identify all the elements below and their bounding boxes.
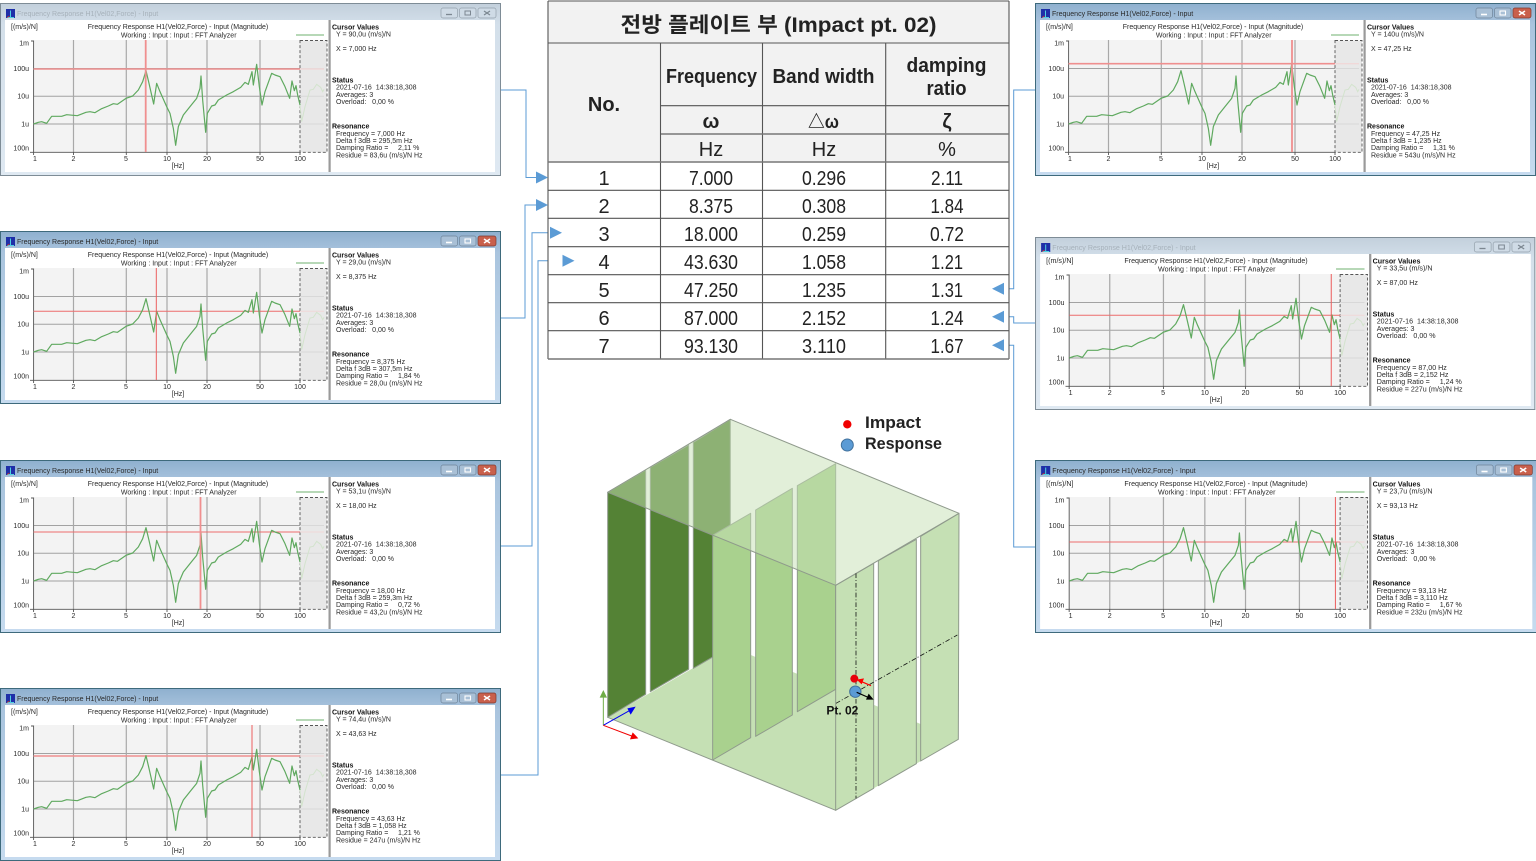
- arrow to row 6: [992, 311, 1004, 323]
- FFT window 3: 18.00 Hz: 1m: [19, 498, 29, 504]
- FFT window 2: 8.375 Hz: 20: [203, 384, 211, 391]
- row 7: 1.67: [930, 336, 964, 358]
- FFT window 4: 43.63 Hz: Residue = 247u (m/s)/N Hz: [336, 838, 421, 844]
- FFT window 5: 47.25 Hz: Frequency Response H1(Vel02,Force) - Input: [1052, 11, 1193, 18]
- FFT window 4: 43.63 Hz: 1u: [21, 806, 29, 814]
- FFT window 3: 18.00 Hz: Working : Input : Input : FFT Analyzer: [121, 490, 237, 496]
- FFT window 2: 8.375 Hz: 10: [163, 384, 171, 391]
- FFT window 3: 18.00 Hz: [(m/s)/N]: [11, 481, 38, 488]
- FFT window 4: 43.63 Hz: 2: [72, 841, 76, 848]
- response point marker: [850, 686, 861, 697]
- FFT window 3: 18.00 Hz: Damping Ratio = 0,72 %: [336, 602, 420, 609]
- FFT window 6: 87.00 Hz: Overload: 0,00 %: [1377, 333, 1436, 340]
- FFT window 6: 87.00 Hz: Status: [1373, 312, 1394, 318]
- FFT window 7: 93.13 Hz: 10: [1201, 613, 1209, 620]
- FFT window 5: 47.25 Hz: 2: [1107, 156, 1111, 163]
- FFT window 3: 18.00 Hz: 1: [33, 613, 37, 620]
- FFT window 6: 87.00 Hz: Resonance: [1373, 358, 1411, 364]
- FFT window 1: 7.000 Hz: 1u: [21, 122, 29, 128]
- FFT window 2: 8.375 Hz: Y = 29,0u (m/s)/N: [336, 260, 391, 266]
- FFT window 6: 87.00 Hz: [1036, 238, 1535, 410]
- FFT window 4: 43.63 Hz: 2021-07-16 14:38:18,308: [336, 770, 417, 776]
- FFT window 2: 8.375 Hz: Frequency Response H1(Vel02,Force) - Input: [17, 239, 158, 246]
- FFT window 5: 47.25 Hz: Resonance: [1367, 124, 1404, 130]
- FFT window 1: 7.000 Hz: Working : Input : Input : FFT Analyzer: [121, 32, 237, 40]
- FFT window 1: 7.000 Hz: Resonance: [332, 124, 369, 130]
- row 1: [598, 168, 963, 190]
- header: damping ratio: [906, 55, 986, 100]
- FFT window 5: 47.25 Hz: Status: [1367, 78, 1388, 84]
- unit row: Hz: [812, 139, 836, 161]
- FFT window 3: 18.00 Hz: Residue = 43,2u (m/s)/N Hz: [336, 610, 423, 616]
- FFT window 6: 87.00 Hz: 1: [1069, 390, 1073, 397]
- FFT window 1: 7.000 Hz: Frequency Response H1(Vel02,Force) - Input: [17, 11, 158, 18]
- FFT window 3: 18.00 Hz: [Hz]: [172, 620, 184, 627]
- connector: chart 5 to row 5: [1003, 90, 1035, 289]
- FFT window 3: 18.00 Hz: Status: [332, 534, 354, 542]
- FFT window 1: 7.000 Hz: 20: [203, 156, 211, 163]
- FFT window 5: 47.25 Hz: 10u: [1052, 94, 1064, 100]
- FFT window 3: 18.00 Hz: 50: [256, 613, 264, 620]
- row 7: 3.110: [802, 336, 846, 358]
- legend: impact dot: [843, 420, 852, 428]
- floor: [608, 647, 958, 810]
- header: Band width: Band width: [772, 66, 874, 88]
- FFT window 7: 93.13 Hz: [Hz]: [1210, 620, 1222, 627]
- FFT window 2: 8.375 Hz: Residue = 28,0u (m/s)/N Hz: [336, 380, 423, 388]
- FFT window 6: 87.00 Hz: 100n: [1049, 380, 1065, 386]
- FFT window 4: 43.63 Hz: Working : Input : Input : FFT Analyzer: [121, 718, 237, 724]
- FFT window 5: 47.25 Hz: 5: [1159, 156, 1163, 163]
- row 4: [598, 252, 963, 274]
- row 7: 7: [598, 336, 610, 358]
- FFT window 4: 43.63 Hz: Overload: 0,00 %: [336, 784, 394, 791]
- FFT window 4: 43.63 Hz: Frequency = 43,63 Hz: [336, 816, 406, 823]
- FFT window 7: 93.13 Hz: 20: [1242, 613, 1250, 620]
- FFT window 6: 87.00 Hz: Delta f 3dB = 2,152 Hz: [1377, 372, 1449, 379]
- FFT window 5: 47.25 Hz: [(m/s)/N]: [1046, 24, 1073, 31]
- FFT window 3: 18.00 Hz: Frequency Response H1(Vel02,Force) - Input: [17, 468, 158, 475]
- FFT window 3: 18.00 Hz: X = 18,00 Hz: [336, 503, 377, 510]
- FFT window 5: 47.25 Hz: 1: [1068, 156, 1072, 163]
- FFT window 4: 43.63 Hz: Status: [332, 762, 354, 770]
- FFT window 7: 93.13 Hz: 100n: [1049, 603, 1065, 609]
- row 3: 0.259: [802, 224, 846, 246]
- FFT window 5: 47.25 Hz: Delta f 3dB = 1,235 Hz: [1371, 138, 1442, 145]
- FFT window 3: 18.00 Hz: 20: [203, 613, 211, 620]
- FFT window 2: 8.375 Hz: 100u: [13, 294, 29, 301]
- unit row: Hz: [699, 139, 723, 161]
- header: damping ratio: ratio: [926, 78, 966, 100]
- legend: impact label: Impact: [865, 414, 922, 432]
- middle partition panels: [713, 464, 836, 760]
- FFT window 4: 43.63 Hz: 10u: [17, 778, 29, 786]
- right wall panels: [836, 513, 959, 810]
- FFT window 1: 7.000 Hz: 1m: [19, 40, 29, 48]
- FFT window 1: 7.000 Hz: 100u: [13, 66, 29, 73]
- FFT window 5: 47.25 Hz: 1m: [1054, 40, 1064, 48]
- FFT window 5: 47.25 Hz: Cursor Values: [1367, 24, 1414, 32]
- row 3: 0.72: [930, 224, 964, 246]
- FFT window 3: 18.00 Hz: Cursor Values: [332, 482, 379, 488]
- FFT window 5: 47.25 Hz: 20: [1238, 156, 1246, 163]
- FFT window 6: 87.00 Hz: 50: [1295, 390, 1303, 397]
- FFT window 3: 18.00 Hz: 5: [124, 613, 128, 620]
- FFT window 7: 93.13 Hz: Status: [1373, 535, 1394, 541]
- FFT window 5: 47.25 Hz: X = 47,25 Hz: [1371, 46, 1412, 53]
- connector: chart 6 to row 6: [1003, 317, 1035, 323]
- FFT window 3: 18.00 Hz: 100: [294, 613, 306, 620]
- FFT window 7: 93.13 Hz: Resonance: [1373, 581, 1411, 587]
- FFT window 1: 7.000 Hz: [0, 4, 500, 176]
- FFT window 2: 8.375 Hz: [(m/s)/N]: [11, 252, 38, 259]
- FFT window 2: 8.375 Hz: 1: [33, 384, 37, 391]
- FFT window 5: 47.25 Hz: 2021-07-16 14:38:18,308: [1371, 84, 1452, 92]
- FFT window 2: 8.375 Hz: Damping Ratio = 1,84 %: [336, 373, 420, 380]
- row 3: 18.000: [684, 224, 738, 246]
- FFT window 3: 18.00 Hz: Delta f 3dB = 259,3m Hz: [336, 595, 413, 602]
- legend: response dot: [841, 439, 853, 451]
- FFT window 4: 43.63 Hz: 10: [163, 841, 171, 848]
- FFT window 2: 8.375 Hz: Resonance: [332, 352, 369, 358]
- FFT window 1: 7.000 Hz: [Hz]: [172, 163, 184, 170]
- row 4: 1.058: [802, 252, 846, 274]
- impact point marker: [850, 675, 858, 683]
- FFT window 6: 87.00 Hz: Averages: 3: [1377, 326, 1415, 333]
- row 5: 47.250: [684, 280, 738, 302]
- FFT window 6: 87.00 Hz: 20: [1242, 390, 1250, 397]
- row 6: 6: [598, 308, 610, 330]
- row 5: 1.31: [931, 280, 963, 302]
- FFT window 3: 18.00 Hz: Y = 53,1u (m/s)/N: [336, 488, 391, 496]
- FFT window 1: 7.000 Hz: Y = 90,0u (m/s)/N: [336, 32, 391, 38]
- FFT window 1: 7.000 Hz: 10: [163, 156, 171, 163]
- FFT window 1: 7.000 Hz: 2021-07-16 14:38:18,308: [336, 84, 417, 92]
- FFT window 7: 93.13 Hz: 1u: [1057, 579, 1065, 585]
- FFT window 4: 43.63 Hz: 100: [294, 841, 306, 848]
- symbol row: [703, 111, 952, 133]
- FFT window 2: 8.375 Hz: 50: [256, 384, 264, 391]
- row 4: 1.21: [931, 252, 963, 274]
- FFT window 7: 93.13 Hz: Cursor Values: [1373, 482, 1421, 488]
- FFT window 4: 43.63 Hz: [Hz]: [172, 848, 184, 855]
- FFT window 5: 47.25 Hz: [Hz]: [1207, 163, 1219, 170]
- FFT window 2: 8.375 Hz: X = 8,375 Hz: [336, 274, 377, 281]
- row 1: 7.000: [689, 168, 733, 190]
- arrow to row 2: [536, 199, 548, 211]
- coordinate axes: [600, 690, 638, 739]
- FFT window 7: 93.13 Hz: [(m/s)/N]: [1046, 481, 1073, 488]
- FFT window 6: 87.00 Hz: 2021-07-16 14:38:18,308: [1377, 319, 1459, 325]
- FFT window 4: 43.63 Hz: Y = 74,4u (m/s)/N: [336, 716, 391, 724]
- FFT window 1: 7.000 Hz: Damping Ratio = 2,11 %: [336, 145, 419, 152]
- FFT window 7: 93.13 Hz: X = 93,13 Hz: [1377, 503, 1418, 510]
- FFT window 3: 18.00 Hz: 10u: [17, 550, 29, 558]
- FFT window 4: 43.63 Hz: 20: [203, 841, 211, 848]
- FFT window 4: 43.63 Hz: 50: [256, 841, 264, 848]
- arrow to row 3: [550, 227, 562, 239]
- FFT window 2: 8.375 Hz: Overload: 0,00 %: [336, 327, 394, 334]
- FFT window 5: 47.25 Hz: Averages: 3: [1371, 92, 1408, 99]
- FFT window 7: 93.13 Hz: 10u: [1053, 551, 1065, 557]
- row 1: 0.296: [802, 168, 846, 190]
- FFT window 3: 18.00 Hz: Averages: 3: [336, 549, 373, 556]
- FFT window 1: 7.000 Hz: Averages: 3: [336, 92, 373, 99]
- FFT window 1: 7.000 Hz: 10u: [17, 94, 29, 100]
- FFT window 6: 87.00 Hz: 100: [1334, 390, 1346, 397]
- FFT window 2: 8.375 Hz: [Hz]: [172, 391, 184, 398]
- FFT window 7: 93.13 Hz: Damping Ratio = 1,67 %: [1377, 602, 1463, 609]
- 3D model of the plate enclosure: [600, 419, 959, 810]
- FFT window 5: 47.25 Hz: 10: [1198, 156, 1206, 163]
- arrow to row 7: [992, 339, 1004, 351]
- row 3: 3: [598, 224, 610, 246]
- FFT window 6: 87.00 Hz: 10: [1201, 390, 1209, 397]
- FFT window 7: 93.13 Hz: Residue = 232u (m/s)/N Hz: [1377, 610, 1463, 616]
- row 4: 43.630: [684, 252, 738, 274]
- FFT window 2: 8.375 Hz: Delta f 3dB = 307,5m Hz: [336, 366, 413, 373]
- FFT window 6: 87.00 Hz: Damping Ratio = 1,24 %: [1377, 379, 1463, 386]
- FFT window 6: 87.00 Hz: Frequency = 87,00 Hz: [1377, 365, 1447, 372]
- FFT window 2: 8.375 Hz: 100n: [13, 374, 29, 380]
- FFT window 1: 7.000 Hz: 50: [256, 156, 264, 163]
- row 6: 1.24: [930, 308, 964, 330]
- data table: [548, 1, 1009, 359]
- FFT window 7: 93.13 Hz: [1036, 460, 1536, 632]
- header: Frequency: Frequency: [666, 66, 758, 88]
- arrow to row 4: [562, 255, 574, 267]
- row 2: 1.84: [930, 196, 964, 218]
- connector: chart 7 to row 7: [1003, 345, 1035, 547]
- FFT window 4: 43.63 Hz: Damping Ratio = 1,21 %: [336, 830, 420, 837]
- FFT window 2: 8.375 Hz: Status: [332, 306, 354, 312]
- FFT window 7: 93.13 Hz: 100u: [1049, 523, 1065, 530]
- FFT window 5: 47.25 Hz: Frequency = 47,25 Hz: [1371, 131, 1441, 138]
- impact direction arrow: [857, 678, 871, 686]
- row 7: 93.130: [684, 336, 738, 358]
- row 3: [598, 224, 964, 246]
- FFT window 3: 18.00 Hz: 100n: [13, 602, 29, 610]
- FFT window 1: 7.000 Hz: Status: [332, 78, 354, 84]
- table title: 전방 플레이트 부 (Impact pt. 02): [620, 14, 936, 37]
- arrow to row 5: [992, 283, 1004, 295]
- FFT window 4: 43.63 Hz: 1: [33, 841, 37, 848]
- row 5: 1.235: [802, 280, 846, 302]
- FFT window 4: 43.63 Hz: 5: [124, 841, 128, 848]
- FFT window 3: 18.00 Hz: 10: [163, 613, 171, 620]
- connector: chart 2 to row 2: [501, 205, 537, 318]
- row 2: 0.308: [802, 196, 846, 218]
- FFT window 6: 87.00 Hz: 5: [1161, 390, 1165, 397]
- FFT window 1: 7.000 Hz: 100: [294, 156, 306, 163]
- FFT window 2: 8.375 Hz: 2021-07-16 14:38:18,308: [336, 312, 417, 320]
- FFT window 7: 93.13 Hz: Frequency Response H1(Vel02,Force) - Input: [1052, 468, 1196, 475]
- FFT window 2: 8.375 Hz: 1u: [21, 350, 29, 356]
- FFT window 6: 87.00 Hz: 10u: [1053, 328, 1065, 334]
- FFT window 5: 47.25 Hz: 1u: [1056, 122, 1064, 128]
- row 4: 4: [598, 252, 610, 274]
- FFT window 3: 18.00 Hz: Frequency Response H1(Vel02,Force) - Input (Magnitude): [88, 481, 268, 488]
- FFT window 4: 43.63 Hz: Averages: 3: [336, 777, 373, 784]
- FFT window 6: 87.00 Hz: Residue = 227u (m/s)/N Hz: [1377, 387, 1463, 393]
- row 2: 8.375: [689, 196, 733, 218]
- connector: chart 1 to row 1: [501, 90, 537, 178]
- arrow to row 1: [536, 172, 548, 184]
- FFT window 6: 87.00 Hz: Y = 33,5u (m/s)/N: [1377, 266, 1432, 272]
- symbol row: △ω: [808, 112, 839, 132]
- FFT window 2: 8.375 Hz: Working : Input : Input : FFT Analyzer: [121, 260, 237, 268]
- FFT window 1: 7.000 Hz: 5: [124, 156, 128, 163]
- FFT window 5: 47.25 Hz: [1036, 4, 1536, 176]
- FFT window 4: 43.63 Hz: Frequency Response H1(Vel02,Force) - Input (Magnitude): [88, 709, 268, 716]
- FFT window 4: 43.63 Hz: [0, 688, 500, 860]
- FFT window 7: 93.13 Hz: Frequency Response H1(Vel02,Force) - Input (Magnitude): [1124, 481, 1308, 488]
- FFT window 2: 8.375 Hz: 5: [124, 384, 128, 391]
- left wall panels: [608, 419, 730, 717]
- FFT window 6: 87.00 Hz: [Hz]: [1210, 397, 1222, 404]
- FFT window 1: 7.000 Hz: Frequency = 7,000 Hz: [336, 131, 406, 138]
- FFT window 2: 8.375 Hz: 10u: [17, 322, 29, 328]
- FFT window 7: 93.13 Hz: 50: [1295, 613, 1303, 620]
- FFT window 7: 93.13 Hz: Overload: 0,00 %: [1377, 556, 1436, 563]
- FFT window 1: 7.000 Hz: 2: [72, 156, 76, 163]
- row 7: [598, 336, 964, 358]
- FFT window 7: 93.13 Hz: 1m: [1055, 498, 1065, 504]
- legend: response label: Response: [865, 435, 942, 453]
- row 6: [598, 308, 964, 330]
- FFT window 6: 87.00 Hz: 1u: [1057, 356, 1065, 362]
- header: No.: No.: [588, 94, 620, 116]
- FFT window 6: 87.00 Hz: [(m/s)/N]: [1046, 258, 1073, 265]
- FFT window 3: 18.00 Hz: [0, 460, 500, 632]
- FFT window 6: 87.00 Hz: 100u: [1049, 300, 1065, 307]
- FFT window 3: 18.00 Hz: Resonance: [332, 580, 369, 588]
- FFT window 7: 93.13 Hz: 100: [1334, 613, 1346, 620]
- FFT window 7: 93.13 Hz: 2: [1108, 613, 1112, 620]
- FFT window 1: 7.000 Hz: X = 7,000 Hz: [336, 46, 377, 53]
- roof plate: [608, 419, 959, 585]
- response direction arrow: [857, 692, 874, 700]
- FFT window 7: 93.13 Hz: 5: [1161, 613, 1165, 620]
- FFT window 7: 93.13 Hz: Working : Input : Input : FFT Analyzer: [1158, 490, 1276, 496]
- FFT window 3: 18.00 Hz: 1u: [21, 578, 29, 586]
- row 5: 5: [598, 280, 610, 302]
- connector: chart 4 to row 4: [501, 261, 563, 775]
- FFT window 6: 87.00 Hz: 2: [1108, 390, 1112, 397]
- FFT window 2: 8.375 Hz: Frequency Response H1(Vel02,Force) - Input (Magnitude): [88, 252, 268, 259]
- FFT window 4: 43.63 Hz: [(m/s)/N]: [11, 709, 38, 716]
- row 1: 2.11: [931, 168, 963, 190]
- connector: chart 3 to row 3: [501, 233, 551, 546]
- FFT window 5: 47.25 Hz: Damping Ratio = 1,31 %: [1371, 145, 1455, 152]
- row 6: 87.000: [684, 308, 738, 330]
- point label: Pt. 02: [826, 704, 859, 718]
- FFT window 2: 8.375 Hz: Frequency = 8,375 Hz: [336, 359, 406, 366]
- row 2: [598, 196, 964, 218]
- FFT window 7: 93.13 Hz: 2021-07-16 14:38:18,308: [1377, 542, 1459, 548]
- FFT window 2: 8.375 Hz: 100: [294, 384, 306, 391]
- FFT window 7: 93.13 Hz: Delta f 3dB = 3,110 Hz: [1377, 595, 1448, 602]
- FFT window 4: 43.63 Hz: X = 43,63 Hz: [336, 731, 377, 738]
- row 2: 2: [598, 196, 610, 218]
- FFT window 5: 47.25 Hz: 50: [1291, 156, 1299, 163]
- FFT window 4: 43.63 Hz: Frequency Response H1(Vel02,Force) - Input: [17, 696, 158, 703]
- legend: [841, 414, 942, 453]
- FFT window 3: 18.00 Hz: 2021-07-16 14:38:18,308: [336, 542, 417, 548]
- FFT window 1: 7.000 Hz: Residue = 83,6u (m/s)/N Hz: [336, 152, 423, 160]
- FFT window 5: 47.25 Hz: Working : Input : Input : FFT Analyzer: [1156, 32, 1272, 40]
- FFT window 1: 7.000 Hz: Overload: 0,00 %: [336, 99, 394, 106]
- FFT window 5: 47.25 Hz: 100u: [1048, 66, 1064, 73]
- FFT window 3: 18.00 Hz: Frequency = 18,00 Hz: [336, 588, 406, 595]
- FFT window 4: 43.63 Hz: 100n: [13, 830, 29, 838]
- FFT window 3: 18.00 Hz: Overload: 0,00 %: [336, 556, 394, 563]
- FFT window 6: 87.00 Hz: Frequency Response H1(Vel02,Force) - Input (Magnitude): [1124, 258, 1308, 265]
- FFT window 5: 47.25 Hz: Y = 140u (m/s)/N: [1371, 32, 1424, 38]
- FFT window 1: 7.000 Hz: 1: [33, 156, 37, 163]
- FFT window 2: 8.375 Hz: 1m: [19, 268, 29, 276]
- FFT window 5: 47.25 Hz: Frequency Response H1(Vel02,Force) - Input (Magnitude): [1123, 24, 1303, 31]
- FFT window 1: 7.000 Hz: Delta f 3dB = 295,5m Hz: [336, 138, 413, 145]
- FFT window 7: 93.13 Hz: 1: [1069, 613, 1073, 620]
- FFT window 2: 8.375 Hz: 2: [72, 384, 76, 391]
- FFT window 3: 18.00 Hz: 2: [72, 613, 76, 620]
- unit row: [699, 139, 956, 161]
- FFT window 6: 87.00 Hz: Working : Input : Input : FFT Analyzer: [1158, 267, 1276, 273]
- FFT window 5: 47.25 Hz: 100n: [1048, 146, 1064, 152]
- FFT window 4: 43.63 Hz: 100u: [13, 751, 29, 758]
- FFT window 4: 43.63 Hz: Delta f 3dB = 1,058 Hz: [336, 823, 407, 830]
- FFT window 4: 43.63 Hz: 1m: [19, 726, 29, 732]
- FFT window 1: 7.000 Hz: 100n: [13, 146, 29, 152]
- FFT window 1: 7.000 Hz: Cursor Values: [332, 24, 379, 32]
- symbol row: ζ: [942, 111, 952, 133]
- FFT window 6: 87.00 Hz: X = 87,00 Hz: [1377, 280, 1418, 287]
- FFT window 4: 43.63 Hz: Resonance: [332, 808, 369, 816]
- FFT window 7: 93.13 Hz: Averages: 3: [1377, 549, 1415, 556]
- floor front edge: [608, 717, 836, 810]
- FFT window 6: 87.00 Hz: Frequency Response H1(Vel02,Force) - Input: [1052, 245, 1196, 252]
- row 1: 1: [598, 168, 610, 190]
- FFT window 2: 8.375 Hz: [0, 232, 500, 404]
- FFT window 4: 43.63 Hz: Cursor Values: [332, 710, 379, 716]
- symbol row: ω: [703, 111, 720, 133]
- FFT window 7: 93.13 Hz: Y = 23,7u (m/s)/N: [1377, 489, 1432, 495]
- FFT window 3: 18.00 Hz: 100u: [13, 523, 29, 530]
- FFT window 7: 93.13 Hz: Frequency = 93,13 Hz: [1377, 588, 1447, 595]
- FFT window 6: 87.00 Hz: 1m: [1055, 275, 1065, 281]
- FFT window 1: 7.000 Hz: [(m/s)/N]: [11, 24, 38, 31]
- unit row: %: [938, 139, 956, 161]
- FFT window 2: 8.375 Hz: Averages: 3: [336, 320, 373, 327]
- FFT window 5: 47.25 Hz: Residue = 543u (m/s)/N Hz: [1371, 152, 1456, 160]
- FFT window 6: 87.00 Hz: Cursor Values: [1373, 259, 1421, 265]
- header: damping ratio: damping: [906, 55, 986, 77]
- FFT window 5: 47.25 Hz: 100: [1329, 156, 1341, 163]
- FFT window 1: 7.000 Hz: Frequency Response H1(Vel02,Force) - Input (Magnitude): [88, 24, 268, 31]
- FFT window 2: 8.375 Hz: Cursor Values: [332, 252, 379, 260]
- measurement dash-dot axes: [836, 573, 957, 798]
- row 6: 2.152: [802, 308, 846, 330]
- FFT window 5: 47.25 Hz: Overload: 0,00 %: [1371, 99, 1429, 106]
- row 5: [598, 280, 963, 302]
